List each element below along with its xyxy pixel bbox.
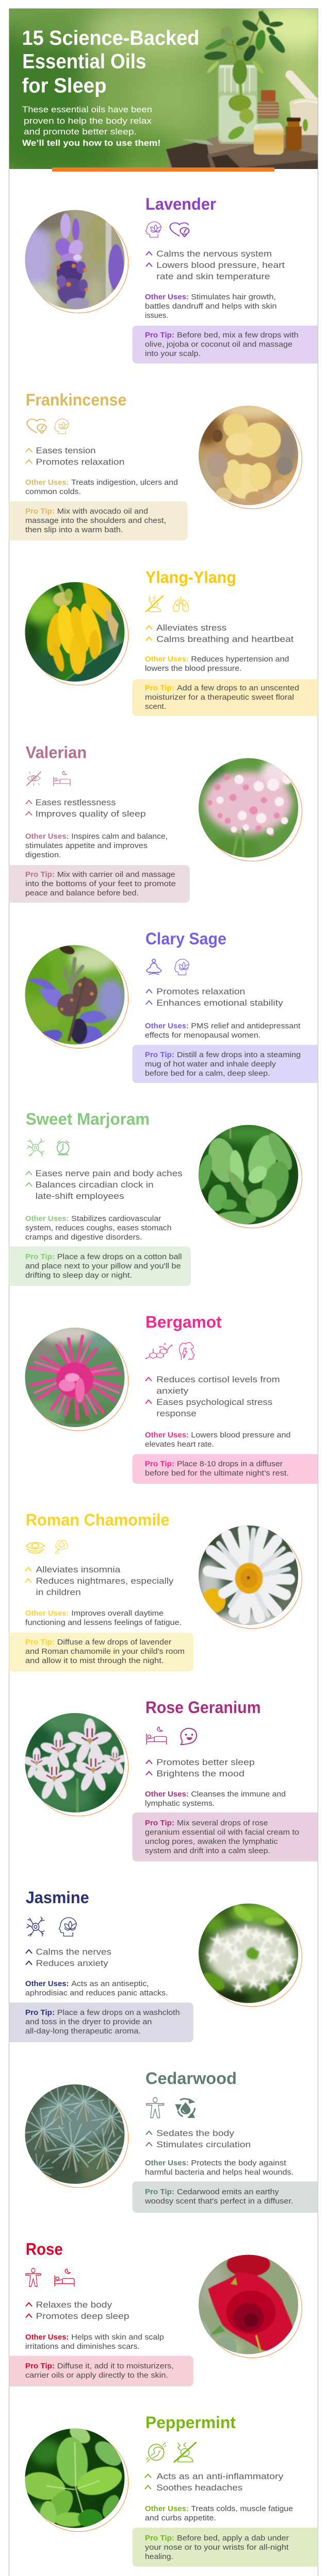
pro tip callout: Before bed, apply a dab under (177, 2534, 289, 2543)
panel: Clary Sage (21, 929, 318, 1083)
benefits list (146, 249, 285, 281)
other uses (145, 1431, 290, 1449)
panel: Ylang-Ylang (22, 568, 318, 716)
pro tip callout: before bed for the ultimate night’s rest. (145, 1469, 289, 1478)
pro tip callout (132, 2528, 318, 2567)
photo: sweet marjoram (194, 1123, 302, 1228)
icon: bed and moon (55, 2269, 74, 2286)
icon: lungs (173, 597, 188, 612)
benefits list (146, 987, 284, 1008)
hero title (22, 27, 199, 97)
icon: joint inflammation (146, 2443, 166, 2462)
pro tip callout: Pro Tip: (25, 1253, 55, 1261)
other uses: battles dandruff and helps with skin (145, 302, 277, 311)
panel: Bergamot (23, 1313, 318, 1484)
benefits list (146, 1758, 255, 1778)
photo: rose geranium (21, 1710, 130, 1816)
pro tip callout: Distill a few drops into a steaming (177, 1051, 301, 1059)
icon: neuron (27, 1917, 44, 1936)
icon: neuron (27, 1139, 44, 1156)
benefits list (26, 1947, 111, 1968)
other uses: irritations and diminishes scars. (25, 2343, 140, 2351)
other uses (145, 2505, 293, 2522)
benefits list: Reduces nightmares, especially (36, 1577, 174, 1586)
pro tip callout: Place a few drops on a cotton ball (57, 1253, 182, 1261)
photo: peppermint (20, 2422, 128, 2532)
benefits list: Soothes headaches (156, 2483, 242, 2493)
pro tip callout (132, 1045, 318, 1083)
benefits list: in children (36, 1588, 81, 1597)
heading: Lavender: Lavender (145, 195, 216, 213)
benefits list: anxiety (156, 1386, 189, 1396)
other uses: harmful bacteria and helps heal wounds. (145, 2168, 293, 2177)
pro tip callout: Pro Tip: (145, 2534, 174, 2543)
benefits list: response (156, 1409, 197, 1418)
other uses: Inspires calm and balance, (71, 833, 168, 841)
pro tip callout: olive, jojoba or coconut oil and massage (145, 341, 292, 349)
panel: Sweet Marjoram (9, 1110, 302, 1286)
icon: mind lotus (59, 1918, 76, 1936)
panel: Lavender (18, 195, 318, 364)
pro tip callout: geranium essential oil with facial cream to (145, 1828, 299, 1837)
other uses: Other Uses: (25, 1609, 69, 1618)
other uses: lowers the blood pressure. (145, 665, 242, 673)
other uses: Other Uses: (145, 1022, 189, 1030)
other uses: Other Uses: (145, 655, 189, 664)
icon: stress relief (146, 596, 163, 612)
other uses: Other Uses: (25, 833, 69, 841)
benefits list: Promotes relaxation (156, 987, 245, 996)
pro tip callout: woodsy scent that's perfect in a diffuser. (144, 2197, 293, 2206)
benefits list (145, 2472, 284, 2493)
icon: cortisol molecule (145, 1343, 173, 1359)
other uses (25, 1980, 168, 1997)
pro tip callout: Mix with carrier oil and massage (57, 871, 175, 879)
benefits list: Calms breathing and heartbeat (156, 635, 294, 644)
other uses: Other Uses: (145, 293, 189, 301)
icon: thought with cross (55, 1540, 68, 1554)
panel: Roman Chamomile (9, 1511, 302, 1671)
other uses (25, 1215, 171, 1242)
pro tip callout: mug of hot water and inhale deeply (145, 1060, 276, 1069)
other uses: aphrodisiac and reduces panic attacks. (25, 1989, 168, 1997)
pro tip callout: scent. (145, 703, 166, 711)
pro tip callout: Diffuse it, add it to moisturizers, (57, 2362, 174, 2370)
benefits list: Alleviates stress (156, 623, 226, 633)
other uses: Other Uses: (25, 1980, 69, 1988)
photo: lavender (25, 210, 129, 313)
pro tip callout: unclog pores, awaken the lymphatic (145, 1838, 278, 1846)
pro tip callout: Cedarwood emits an earthy (177, 2188, 280, 2196)
benefits list: Eases psychological stress (156, 1398, 272, 1407)
pro tip callout: and toss in the dryer to provide an (25, 2018, 152, 2026)
icon: meditation (146, 959, 161, 974)
hero banner (9, 9, 318, 169)
other uses (145, 2159, 293, 2177)
benefits list: Acts as an anti-inflammatory (157, 2472, 284, 2481)
other uses: digestion. (25, 851, 61, 859)
benefits list (25, 1565, 174, 1597)
heading: Ylang-Ylang: Ylang-Ylang (145, 568, 236, 587)
other uses: Acts as an antiseptic, (71, 1980, 149, 1988)
photo: ylang-ylang (22, 580, 128, 685)
photo: jasmine (197, 1902, 302, 2007)
pro tip callout: drifting to sleep day or night. (25, 1272, 132, 1280)
hero intro text: These essential oils have been (22, 105, 152, 114)
other uses: Cleanses the immune and (191, 1790, 286, 1799)
benefits list: Calms the nerves (36, 1947, 111, 1957)
pro tip callout (132, 679, 318, 716)
benefits list: Reduces cortisol levels from (156, 1375, 280, 1384)
icon: mind lotus (54, 419, 69, 434)
pro tip callout: Pro Tip: (145, 2188, 174, 2196)
pro tip callout: into the bottoms of your feet to promote (25, 880, 176, 888)
other uses: Treats colds, muscle fatigue (191, 2505, 293, 2513)
pro tip callout (132, 2181, 318, 2213)
pro tip callout: Pro Tip: (145, 1819, 174, 1827)
orange bar under hero (52, 167, 274, 172)
pro tip callout: your nose or to your wrists for all-night (145, 2544, 289, 2552)
hero title: 15 Science-Backed (22, 27, 199, 49)
hero intro text: proven to help the body relax (24, 116, 152, 126)
icon: restless eye (27, 772, 41, 786)
benefits list (26, 1169, 183, 1201)
benefits list: Promotes relaxation (36, 457, 125, 467)
icon: bed and moon (54, 771, 70, 786)
pro tip callout: Diffuse a few drops of lavender (57, 1638, 172, 1647)
hero intro text: We’ll tell you how to use them! (22, 139, 161, 148)
other uses (25, 833, 168, 859)
pro tip callout: Pro Tip: (25, 871, 55, 879)
other uses: Reduces hypertension and (191, 655, 289, 664)
benefits list (26, 446, 125, 467)
pro tip callout: Pro Tip: (25, 2362, 55, 2370)
pro tip callout: and place next to your pillow and you'll be (25, 1262, 181, 1270)
benefits list: rate and skin temperature (156, 272, 270, 281)
benefits list: Promotes deep sleep (36, 2312, 129, 2321)
icon: alarm clock (57, 1141, 69, 1155)
benefits list: Eases tension (36, 446, 96, 455)
heading: Rose: Rose (26, 2240, 63, 2259)
heading: Jasmine: Jasmine (26, 1888, 89, 1907)
pro tip callout (132, 1454, 318, 1484)
other uses (25, 1609, 182, 1627)
heading: Cedarwood: Cedarwood (145, 2069, 237, 2088)
photo: roman chamomile (195, 1523, 302, 1630)
other uses: Protects the body against (191, 2159, 286, 2167)
icon: circulation drop (175, 2098, 195, 2118)
benefits list: Eases nerve pain and body aches (36, 1169, 183, 1178)
pro tip callout (9, 2003, 193, 2042)
benefits list: Enhances emotional stability (156, 998, 284, 1008)
hero intro text: and promote better sleep. (24, 127, 137, 137)
icon: stressed head (179, 1343, 194, 1360)
pro tip callout: Place 8-10 drops in a diffuser (177, 1460, 283, 1468)
photo: valerian (194, 754, 302, 862)
photo: clary sage (21, 943, 128, 1051)
pro tip callout (9, 2355, 193, 2386)
heading: Rose Geranium: Rose Geranium (145, 1698, 261, 1717)
heading: Bergamot: Bergamot (145, 1313, 222, 1331)
benefits list (145, 1375, 280, 1418)
heading: Sweet Marjoram: Sweet Marjoram (26, 1110, 150, 1128)
other uses: stimulates appetite and improves (25, 842, 148, 850)
benefits list (146, 2129, 251, 2149)
other uses: Other Uses: (25, 1215, 69, 1223)
benefits list: Sedates the body (156, 2129, 235, 2138)
benefits list: Balances circadian clock in (36, 1180, 154, 1190)
other uses: elevates heart rate. (145, 1440, 214, 1449)
heading: Roman Chamomile: Roman Chamomile (26, 1511, 170, 1529)
other uses (145, 655, 289, 673)
icon: headache relief (174, 2443, 196, 2462)
other uses: Stimulates hair growth, (191, 293, 276, 301)
other uses: Other Uses: (25, 479, 69, 487)
icon: mind lotus (174, 959, 189, 975)
other uses: Treats indigestion, ulcers and (71, 479, 178, 487)
pro tip callout: carrier oils or apply directly to the skin. (25, 2371, 168, 2380)
hero title: Essential Oils (22, 50, 146, 73)
other uses (145, 1790, 286, 1808)
benefits list: Alleviates insomnia (36, 1565, 121, 1574)
pro tip callout: moisturizer for a therapeutic sweet floral (145, 693, 294, 702)
photo: rose (199, 2255, 302, 2358)
benefits list: Improves quality of sleep (36, 809, 146, 819)
panel: Peppermint (20, 2413, 318, 2567)
pro tip callout: Before bed, mix a few drops with (177, 331, 299, 340)
pro tip callout: Place a few drops on a washcloth (57, 2009, 180, 2017)
other uses: and curbs appetite. (145, 2514, 216, 2522)
photo: cedarwood (21, 2082, 130, 2188)
benefits list: Calms the nervous system (156, 249, 272, 259)
benefits list: Stimulates circulation (156, 2140, 251, 2149)
other uses (25, 479, 178, 496)
pro tip callout: then slip into a warm bath. (25, 526, 123, 534)
benefits list: Relaxes the body (36, 2300, 112, 2310)
other uses (25, 2333, 164, 2351)
hero photo: oil bottles and plant on wood (9, 9, 318, 169)
other uses: PMS relief and antidepressant (191, 1022, 300, 1030)
other uses: Other Uses: (145, 1431, 189, 1439)
heading: Frankincense: Frankincense (26, 391, 126, 409)
hero title: for Sleep (22, 74, 106, 97)
benefits list: Eases restlessness (36, 798, 116, 807)
photo: bergamot (23, 1324, 128, 1431)
icon: smiling speech bubble (181, 1728, 197, 1744)
other uses: system, reduces coughs, eases stomach (25, 1224, 171, 1232)
panel: Valerian (9, 743, 302, 903)
panel: Jasmine (9, 1888, 302, 2042)
icon: heart gauge (170, 223, 189, 237)
pro tip callout: before bed for a calm, deep sleep. (145, 1070, 270, 1078)
other uses (145, 293, 277, 320)
other uses: Stabilizes cardiovascular (71, 1215, 161, 1223)
pro tip callout: Pro Tip: (25, 1638, 55, 1647)
benefits list (146, 623, 294, 644)
benefits list: Brightens the mood (156, 1769, 244, 1778)
pro tip callout: into your scalp. (145, 350, 201, 358)
panel: Rose (9, 2240, 302, 2386)
other uses: Other Uses: (145, 2159, 189, 2167)
other uses: issues. (145, 312, 168, 320)
pro tip callout: Pro Tip: (25, 2009, 55, 2017)
hero intro text (22, 105, 161, 148)
panel: Frankincense (9, 391, 302, 540)
pro tip callout: system and drift into a calm sleep. (145, 1847, 270, 1855)
pro tip callout: Pro Tip: (25, 507, 55, 516)
pro tip callout: Pro Tip: (145, 684, 174, 692)
other uses (145, 1022, 300, 1040)
pro tip callout (132, 1812, 318, 1861)
other uses: Helps with skin and scalp (71, 2333, 164, 2342)
panel: Rose Geranium (21, 1698, 318, 1861)
other uses: Lowers blood pressure and (191, 1431, 290, 1439)
heading: Clary Sage: Clary Sage (145, 929, 226, 948)
pro tip callout: and allow it to mist through the night. (25, 1657, 164, 1665)
photo: frankincense (194, 402, 302, 509)
pro tip callout: Add a few drops to an unscented (177, 684, 299, 692)
panel: Cedarwood (21, 2069, 318, 2213)
heading: Peppermint: Peppermint (145, 2413, 236, 2432)
pro tip callout (9, 501, 188, 540)
icon: eye (26, 1543, 44, 1553)
pro tip callout: massage into the shoulders and chest, (25, 517, 166, 525)
heading: Valerian: Valerian (26, 743, 87, 762)
other uses: functioning and lessens feelings of fatigue. (25, 1619, 182, 1627)
pro tip callout: Pro Tip: (145, 331, 174, 340)
benefits list (26, 798, 146, 819)
pro tip callout (9, 1247, 191, 1286)
pro tip callout: Mix with avocado oil and (57, 507, 148, 516)
icon: human body (146, 2097, 164, 2118)
pro tip callout: Mix several drops of rose (177, 1819, 268, 1827)
benefits list: Reduces anxiety (36, 1959, 109, 1968)
other uses: lymphatic systems. (145, 1800, 215, 1808)
icon: mind lotus (146, 222, 161, 237)
other uses: Improves overall daytime (71, 1609, 164, 1618)
icon: heart gauge (27, 419, 46, 433)
other uses: common colds. (25, 488, 81, 496)
pro tip callout (9, 865, 190, 903)
icon: bed and moon (146, 1727, 167, 1744)
pro tip callout: Pro Tip: (145, 1051, 174, 1059)
benefits list: late-shift employees (36, 1192, 124, 1201)
pro tip callout: healing. (145, 2553, 173, 2561)
other uses: effects for menopausal women. (145, 1031, 260, 1040)
benefits list: Lowers blood pressure, heart (156, 261, 285, 270)
pro tip callout: peace and balance before bed. (25, 889, 139, 897)
icon: human body (26, 2268, 41, 2286)
benefits list: Promotes better sleep (156, 1758, 255, 1767)
other uses: Other Uses: (145, 1790, 189, 1799)
benefits list (26, 2300, 129, 2321)
pro tip callout (9, 1632, 193, 1671)
other uses: Other Uses: (145, 2505, 189, 2513)
pro tip callout: and Roman chamomile in your child's room (25, 1648, 185, 1656)
other uses: Other Uses: (25, 2333, 69, 2342)
pro tip callout: Pro Tip: (145, 1460, 174, 1468)
pro tip callout (132, 326, 318, 364)
other uses: cramps and digestive disorders. (25, 1233, 142, 1242)
pro tip callout: all-day-long therapeutic aroma. (25, 2027, 141, 2036)
